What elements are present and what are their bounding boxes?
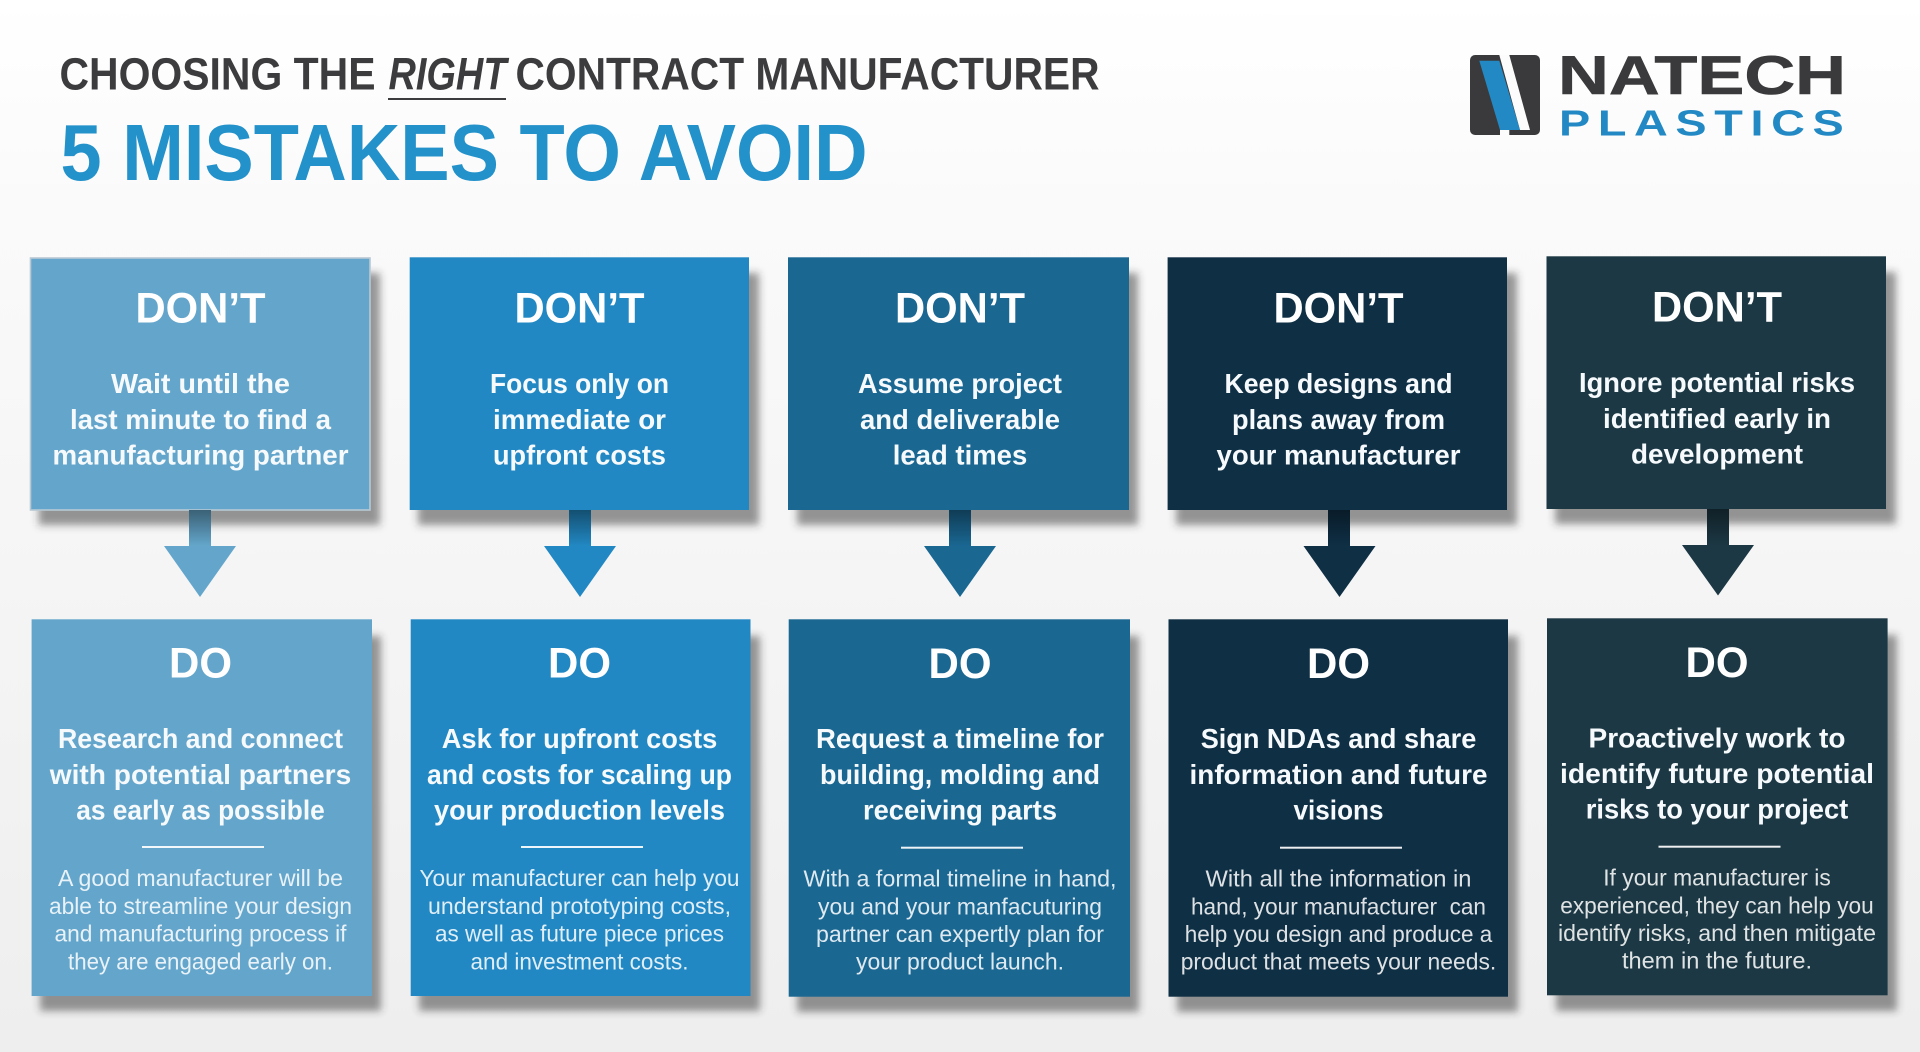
text: explanation: able to streamline your design — [49, 893, 352, 919]
panel: don't 3 — [788, 257, 1138, 525]
text: mistake — [1216, 368, 1461, 470]
text: explanation: you and your manfacuturing — [818, 893, 1102, 919]
heading: do: DO — [928, 640, 992, 688]
text: explanation — [1181, 866, 1496, 975]
text: explanation: A good manufacturer will be — [58, 865, 343, 891]
heading: do: DO — [548, 640, 611, 688]
text: mistake: Wait until the — [111, 368, 290, 399]
text: recommendation: and costs for scaling up — [427, 759, 732, 790]
heading: don't: DON’T — [895, 285, 1025, 333]
panel: do 5 — [1547, 618, 1897, 1011]
text: explanation: and manufacturing process if — [54, 921, 347, 947]
heading: don't: DON’T — [136, 285, 266, 333]
panel: don't 4 — [1168, 257, 1517, 525]
text: recommendation — [1190, 723, 1488, 826]
text: recommendation: Ask for upfront costs — [442, 723, 717, 754]
arrow — [544, 510, 616, 597]
text: recommendation: building, molding and — [820, 759, 1100, 790]
text: explanation: they are engaged early on. — [68, 948, 333, 974]
heading: don't: DON’T — [514, 285, 644, 333]
text: recommendation: information and future — [1190, 759, 1488, 790]
title: choosing the right contract manufacturer — [60, 48, 1100, 100]
text: mistake: manufacturing partner — [52, 440, 349, 470]
arrow — [924, 510, 996, 597]
text: recommendation: risks to your project — [1586, 794, 1848, 824]
title: 5 mistakes to avoid: 5 MISTAKES TO AVOID — [60, 108, 868, 197]
text: mistake — [490, 368, 669, 470]
text: explanation: as well as future piece prices — [435, 921, 724, 947]
text: explanation: If your manufacturer is — [1603, 864, 1831, 890]
panel: don't 1 — [30, 258, 380, 525]
text: mistake: Keep designs and — [1224, 368, 1452, 399]
text: recommendation: Request a timeline for — [816, 723, 1104, 754]
column 3 — [788, 257, 1139, 1012]
text: mistake: plans away from — [1232, 404, 1445, 435]
text: recommendation — [816, 723, 1104, 826]
arrow — [1304, 510, 1376, 597]
text: mistake: immediate or — [493, 404, 666, 435]
text: recommendation: visions — [1294, 794, 1384, 826]
text: explanation: understand prototyping costs, — [428, 893, 731, 919]
text: mistake — [858, 368, 1062, 470]
text: mistake: lead times — [893, 440, 1027, 470]
text: recommendation: with potential partners — [49, 759, 351, 790]
title: choosing the right contract manufacturer: RIGHT — [388, 48, 509, 100]
panel: do 3 — [789, 619, 1139, 1012]
column 2 — [410, 257, 760, 1011]
text: recommendation: Proactively work to — [1588, 722, 1846, 754]
text: explanation: product that meets your needs. — [1181, 949, 1496, 975]
panel: do 4 — [1168, 619, 1518, 1012]
logo wordmark: plastics: PLASTICS — [1559, 103, 1844, 143]
text: explanation: With all the information in — [1206, 866, 1472, 892]
arrow — [1682, 509, 1754, 596]
text: explanation: your product launch. — [856, 949, 1064, 975]
arrow — [164, 510, 236, 597]
text: recommendation — [427, 723, 732, 826]
text: mistake: last minute to find a — [70, 404, 331, 435]
text: recommendation — [1560, 722, 1874, 824]
text: explanation: partner can expertly plan for — [816, 921, 1104, 947]
panel: don't 2 — [410, 257, 759, 525]
heading: do: DO — [1686, 639, 1748, 687]
text: explanation — [1558, 864, 1876, 974]
text: recommendation: receiving parts — [863, 794, 1057, 826]
text: explanation: identify risks, and then mitigate — [1558, 920, 1876, 946]
text: explanation: and investment costs. — [470, 948, 688, 974]
text: explanation: Your manufacturer can help you — [420, 865, 740, 891]
title: choosing the right contract manufacturer: CONTRACT MANUFACTURER — [516, 48, 1100, 100]
text: recommendation: your production levels — [434, 794, 725, 826]
text: explanation — [49, 865, 352, 974]
text: explanation — [804, 866, 1116, 975]
text: explanation: hand, your manufacturer can — [1191, 893, 1486, 919]
text: mistake — [1579, 367, 1855, 470]
text: recommendation: identify future potential — [1560, 758, 1874, 789]
title: choosing the right contract manufacturer: CHOOSING THE — [60, 48, 376, 100]
heading: do: DO — [169, 640, 232, 688]
text: mistake: and deliverable — [860, 404, 1060, 435]
icon: logo mark — [1470, 55, 1540, 135]
panel: do 1 — [32, 619, 381, 1011]
text: mistake — [52, 368, 349, 470]
heading: don't: DON’T — [1274, 285, 1404, 333]
text: mistake: development — [1631, 438, 1803, 470]
panel: do 2 — [411, 619, 760, 1011]
panel: don't 5 — [1546, 256, 1896, 524]
text: mistake: Ignore potential risks — [1579, 367, 1855, 398]
heading: do: DO — [1307, 640, 1370, 688]
text: explanation — [420, 865, 740, 974]
text: recommendation: Research and connect — [58, 723, 343, 754]
text: mistake: Focus only on — [490, 368, 669, 399]
text: recommendation: Sign NDAs and share — [1201, 723, 1476, 754]
text: mistake: upfront costs — [493, 440, 666, 470]
text: mistake: identified early in — [1603, 403, 1831, 434]
logo wordmark: natech: NATECH — [1558, 44, 1846, 106]
logo: natech plastics — [1470, 44, 1846, 143]
column 5 — [1546, 256, 1897, 1011]
column 1 — [30, 258, 381, 1011]
text: mistake: Assume project — [858, 368, 1062, 399]
text: mistake: your manufacturer — [1216, 440, 1461, 470]
text: recommendation — [49, 723, 351, 826]
text: explanation: help you design and produce a — [1185, 921, 1493, 947]
text: explanation: experienced, they can help you — [1560, 892, 1874, 918]
text: recommendation: as early as possible — [76, 794, 325, 826]
text: explanation: them in the future. — [1622, 948, 1812, 974]
column 4 — [1168, 257, 1518, 1012]
text: explanation: With a formal timeline in hand, — [804, 866, 1116, 892]
heading: don't: DON’T — [1652, 284, 1782, 332]
